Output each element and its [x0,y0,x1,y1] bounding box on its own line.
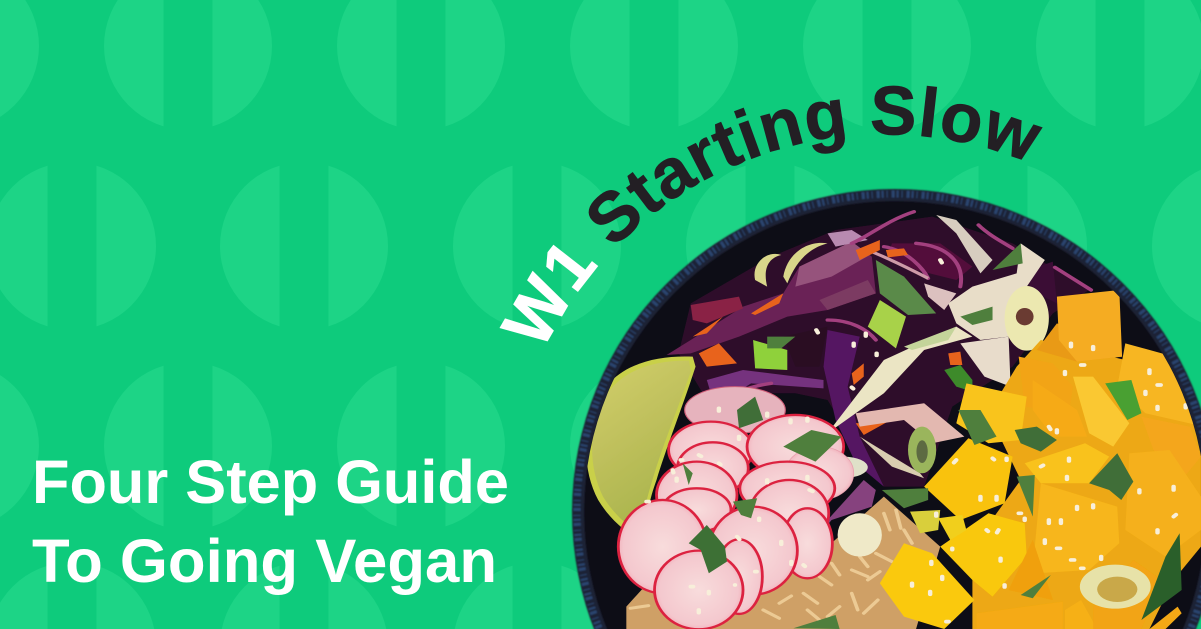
lime wedge [586,356,696,544]
bowl [572,189,1201,629]
title: Four Step Guide To Going Vegan: Four Step Guide [32,448,509,516]
scallions over mango [1080,380,1151,609]
illustration: vegan poke bowl [572,189,1201,629]
mango cubes [880,290,1201,629]
scallion pieces [753,243,1049,557]
white cabbage strips [828,215,1045,478]
title: Four Step Guide To Going Vegan [32,448,509,595]
curved heading: W1 Starting Slow: W1 Starting Slow [500,86,1043,342]
carrot shreds [693,240,962,435]
red cabbage mass [667,212,1091,540]
food [586,212,1201,629]
mint leaves [683,243,1182,629]
title: Four Step Guide To Going Vegan: To Going Vegan [32,527,497,595]
rice [626,497,940,629]
sesame seeds [646,260,1186,622]
radish slices [618,387,854,629]
